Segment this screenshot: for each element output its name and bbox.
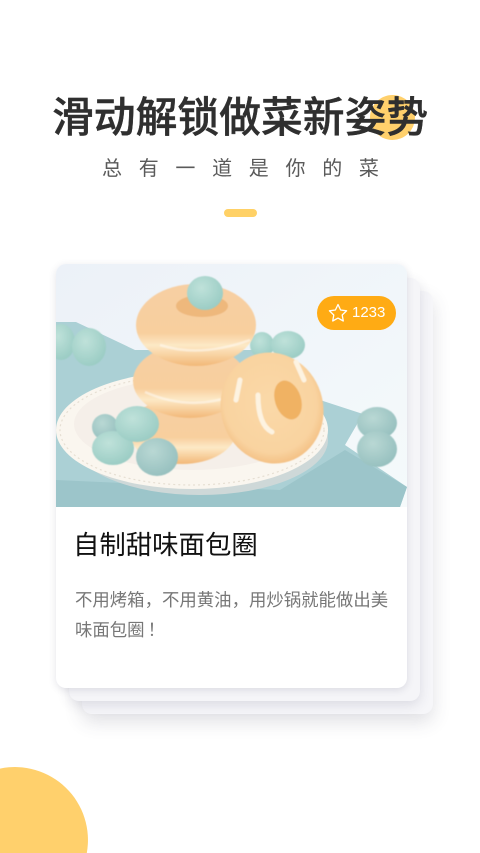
donut stack bbox=[128, 284, 338, 477]
rating count: 1233 bbox=[352, 304, 385, 321]
recipe description: 味面包圈！ bbox=[75, 617, 165, 642]
accent bar bbox=[224, 209, 257, 217]
recipe description bbox=[75, 587, 388, 642]
eggs on plate bbox=[92, 276, 223, 476]
middle card bbox=[69, 278, 420, 701]
back card bbox=[82, 291, 433, 714]
subtitle: 总有一道是你的菜 bbox=[102, 158, 396, 180]
plate bbox=[56, 371, 328, 495]
teal cloth bbox=[56, 322, 407, 507]
icon: star bbox=[328, 304, 348, 322]
donut photo bbox=[56, 264, 407, 507]
main recipe card bbox=[56, 264, 407, 688]
title: 滑动解锁做菜新姿势 bbox=[52, 94, 428, 141]
decorative circle bottom-left bbox=[0, 767, 88, 853]
recipe title: 自制甜味面包圈 bbox=[73, 530, 258, 560]
background eggs bbox=[47, 324, 397, 467]
decorative circle behind title bbox=[370, 95, 415, 140]
recipe description: 不用烤箱，不用黄油，用炒锅就能做出美 bbox=[75, 587, 388, 612]
rating badge bbox=[317, 296, 396, 330]
